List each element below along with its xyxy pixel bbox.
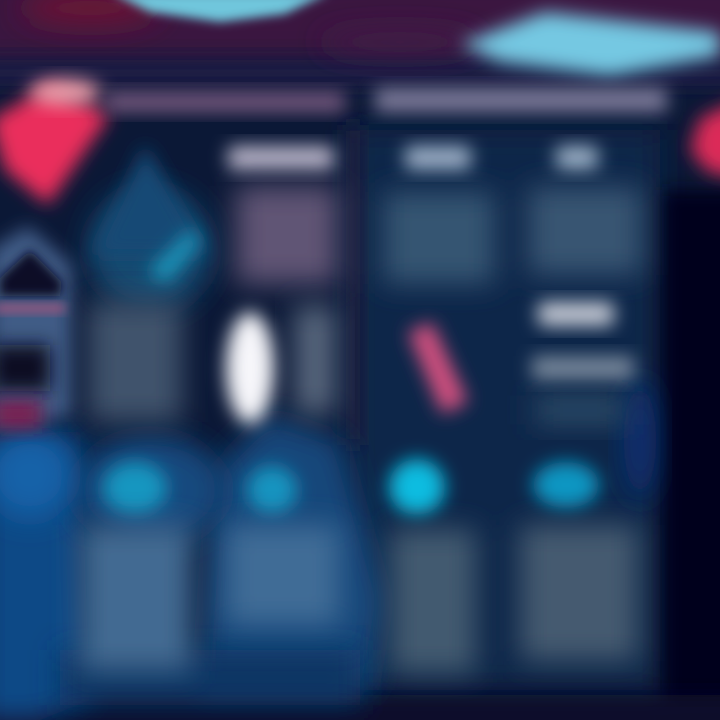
text block: left middle xyxy=(88,302,182,422)
header bars xyxy=(105,88,667,112)
column headings xyxy=(228,146,598,170)
text block: right middle xyxy=(532,302,634,425)
icon: right red shape xyxy=(690,100,720,178)
figure: blue silhouettes xyxy=(0,145,656,720)
icon: left red diamond xyxy=(0,79,110,205)
icon: white figure xyxy=(226,306,335,424)
left icons: dark chevrons xyxy=(0,226,72,430)
top band accents xyxy=(20,0,480,54)
text block: row one xyxy=(236,186,642,284)
icon: pink tag xyxy=(408,322,468,414)
text block: bottom row xyxy=(80,525,638,673)
icons: cyan circles xyxy=(103,459,599,515)
banner: top cyan xyxy=(110,0,330,22)
icon: cyan highlight on hood xyxy=(148,228,200,284)
banner: top right cyan xyxy=(460,12,720,76)
